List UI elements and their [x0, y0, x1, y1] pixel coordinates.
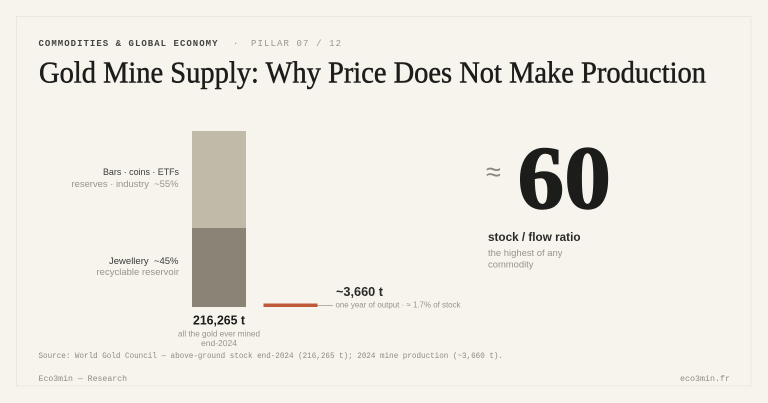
stat label: stock / flow ratio — [488, 232, 580, 244]
connector line — [318, 304, 333, 306]
stat: stock to flow ratio — [486, 129, 611, 270]
stock total label — [178, 314, 260, 348]
title: Gold Mine Supply: Why Price Does Not Make Production — [39, 54, 706, 90]
stock total label: all the gold ever mined — [178, 328, 260, 338]
bar segment: jewellery — [192, 228, 246, 307]
label: jewellery: recyclable reservoir — [96, 267, 179, 278]
label: bars, coins, ETFs: reserves · industry ~55% — [72, 179, 179, 190]
eyebrow: COMMODITIES & GLOBAL ECONOMY — [38, 39, 218, 49]
label: bars, coins, ETFs — [72, 167, 179, 190]
stock total label: 216,265 t — [193, 314, 246, 328]
stat note: the highest of any — [488, 248, 563, 259]
stat note: commodity — [488, 260, 534, 270]
label: bars, coins, ETFs: Bars · coins · ETFs — [103, 167, 179, 178]
annual output label — [336, 285, 461, 310]
bar segment: bars, coins, ETFs — [192, 131, 246, 228]
eyebrow: · — [233, 39, 238, 49]
label: jewellery: Jewellery ~45% — [109, 256, 179, 267]
footer: site: eco3min.fr — [680, 374, 730, 384]
annual output bar — [264, 304, 318, 307]
annual output label: ~3,660 t — [336, 285, 384, 299]
eyebrow — [38, 39, 341, 49]
annual output label: one year of output · ≈ 1.7% of stock — [336, 300, 461, 310]
stacked bar chart: above-ground stock — [192, 131, 246, 307]
footer: brand: Eco3min — Research — [38, 374, 127, 384]
approx sign: ≈ — [486, 157, 501, 187]
source note: Source: World Gold Council — above-ground stock end-2024 (216,265 t); 2024 mine production (~3,660 t). — [38, 351, 503, 361]
stock total label: end-2024 — [201, 338, 237, 348]
big number: 60 — [518, 129, 611, 228]
stat note — [488, 248, 563, 270]
label: jewellery — [96, 256, 179, 278]
eyebrow: PILLAR 07 / 12 — [251, 39, 341, 49]
